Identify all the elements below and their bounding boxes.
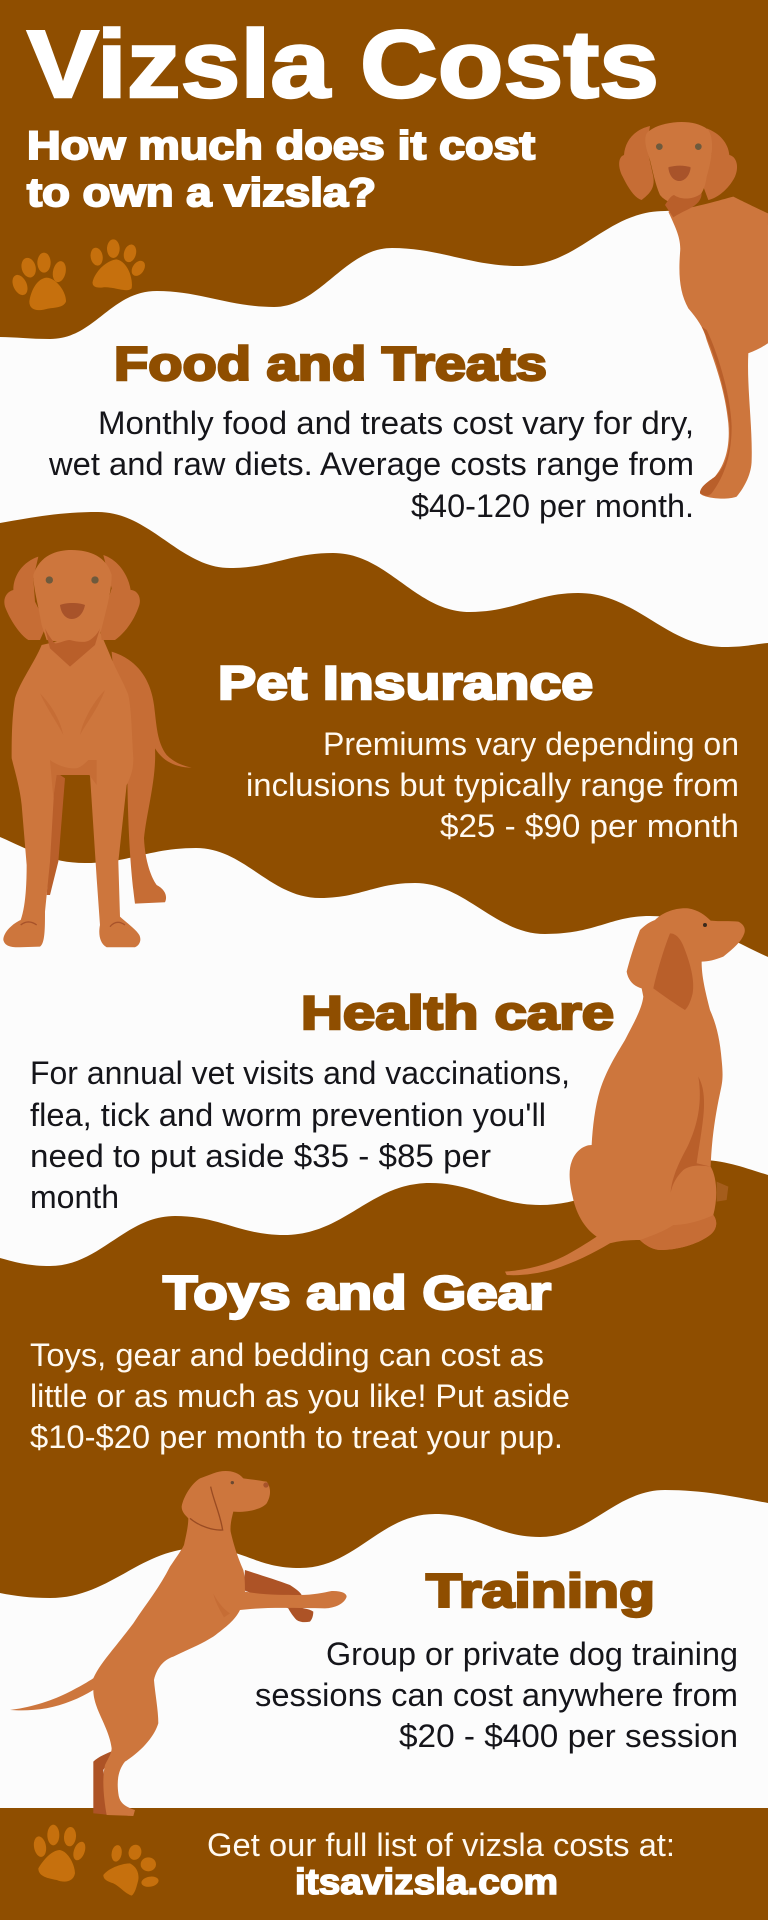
heading: food and treats: Food and Treats [114, 337, 547, 390]
text block: health care: month [30, 1179, 119, 1215]
heading: toys and gear: Toys and Gear [163, 1266, 551, 1319]
text block: training: sessions can cost anywhere from [255, 1677, 738, 1713]
section: pet insurance [218, 656, 739, 844]
section: training [255, 1564, 738, 1754]
text block: health care: need to put aside $35 - $85 per [30, 1138, 491, 1174]
dog: bottom left standing on hind legs [10, 1471, 347, 1816]
section: food and treats [48, 337, 694, 524]
text block: food and treats: wet and raw diets. Average costs range from [48, 446, 694, 482]
text block: pet insurance: Premiums vary depending on [323, 726, 739, 762]
heading: pet insurance: Pet Insurance [218, 656, 593, 709]
panel: header wave [0, 0, 768, 339]
text block: health care: flea, tick and worm prevention you'll [30, 1097, 546, 1133]
text block: food and treats [48, 405, 694, 524]
subtitle: How much does it cost [27, 124, 535, 168]
footer text [207, 1827, 675, 1902]
text block: training: $20 - $400 per session [399, 1718, 738, 1754]
dog: left front facing [3, 550, 192, 947]
panel: pet insurance wave [0, 512, 768, 957]
text block: health care: For annual vet visits and vaccinations, [30, 1055, 570, 1091]
text block: food and treats: $40-120 per month. [411, 488, 694, 524]
text block: pet insurance: $25 - $90 per month [440, 808, 739, 844]
call to action: Get our full list of vizsla costs at: [207, 1827, 675, 1863]
dog: top right standing [619, 122, 768, 499]
icon: paw top right [89, 239, 148, 290]
panel: footer band [0, 1808, 768, 1920]
icon: footer paw left [32, 1825, 88, 1882]
text block: toys and gear: Toys, gear and bedding can cost as [30, 1337, 544, 1373]
text block: training: Group or private dog training [326, 1636, 738, 1672]
text block: toys and gear [30, 1337, 570, 1455]
section: health care [30, 986, 614, 1215]
text block: pet insurance [246, 726, 739, 844]
dog: right sitting from behind [505, 908, 745, 1275]
text block: toys and gear: little or as much as you like! Put aside [30, 1378, 570, 1414]
section: toys and gear [30, 1266, 570, 1455]
icon: footer paw right [103, 1843, 159, 1896]
subtitle: to own a vizsla? [27, 171, 376, 215]
icon: paw top left [9, 253, 68, 310]
panel: toys and gear wave [0, 1160, 768, 1598]
heading: health care: Health care [301, 986, 614, 1039]
text block: training [255, 1636, 738, 1754]
heading: training: Training [426, 1564, 655, 1617]
text block: toys and gear: $10-$20 per month to treat your pup. [30, 1419, 563, 1455]
subtitle [27, 124, 535, 215]
heading group: title [27, 11, 659, 215]
text block: food and treats: Monthly food and treats cost vary for dry, [98, 405, 694, 441]
text block: pet insurance: inclusions but typically range from [246, 767, 739, 803]
text block: health care [30, 1055, 570, 1215]
website: itsavizsla.com [295, 1861, 558, 1902]
title: Vizsla Costs [27, 11, 659, 118]
